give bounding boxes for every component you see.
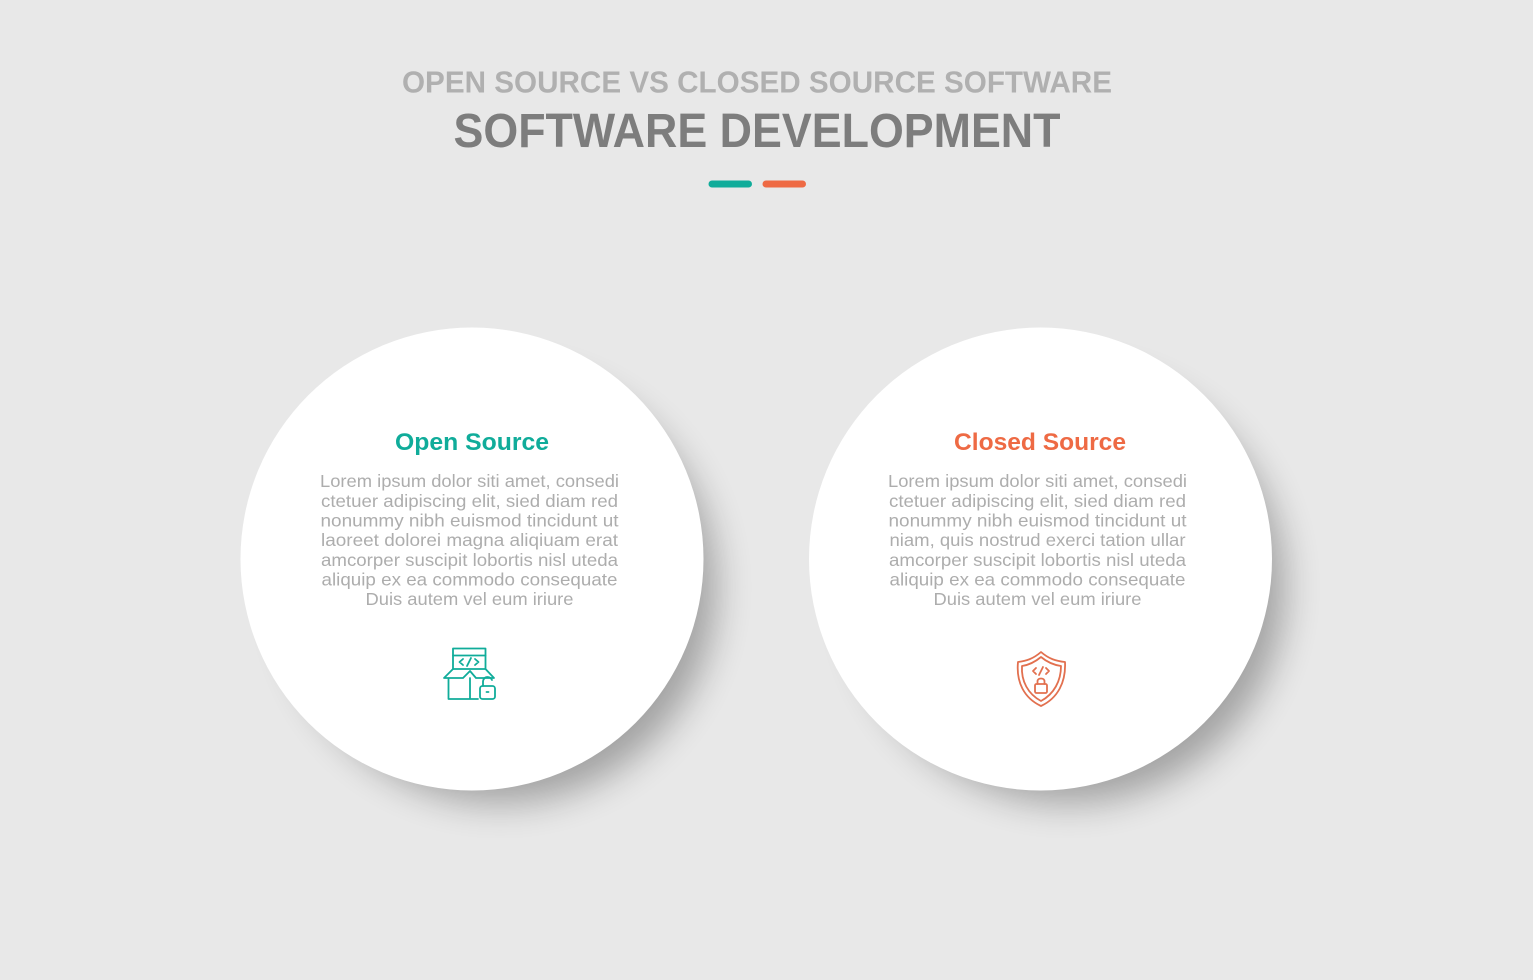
- open source description: Lorem ipsum dolor siti amet, consedi: [320, 471, 619, 491]
- closed source description: amcorper suscipit lobortis nisl uteda: [889, 550, 1186, 570]
- closed source description: ctetuer adipiscing elit, sied diam red: [889, 491, 1186, 511]
- icon: open box with code window and unlocked padlock: [444, 648, 495, 699]
- closed source description: [888, 471, 1187, 609]
- open source description: Duis autem vel eum iriure: [366, 589, 574, 609]
- main heading: SOFTWARE DEVELOPMENT: [454, 105, 1060, 158]
- panel: closed source: [809, 328, 1284, 803]
- closed source description: nonummy nibh euismod tincidunt ut: [888, 510, 1187, 530]
- open source description: [320, 471, 619, 609]
- open source description: aliquip ex ea commodo consequate: [322, 570, 618, 590]
- icon: shield with code and padlock: [1018, 652, 1065, 706]
- open source description: laoreet dolorei magna aliqiuam erat: [321, 530, 618, 550]
- open source description: nonummy nibh euismod tincidunt ut: [320, 510, 619, 530]
- closed source description: Lorem ipsum dolor siti amet, consedi: [888, 471, 1187, 491]
- open source description: ctetuer adipiscing elit, sied diam red: [321, 491, 618, 511]
- open source description: amcorper suscipit lobortis nisl uteda: [321, 550, 618, 570]
- panel: open source: [240, 328, 716, 803]
- circle shadow: [284, 371, 716, 803]
- title block: [402, 64, 1112, 158]
- white circle: [240, 328, 704, 790]
- closed source description: Duis autem vel eum iriure: [934, 589, 1142, 609]
- open source heading: Open Source: [395, 429, 549, 456]
- circle shadow: [852, 371, 1284, 803]
- subtitle: OPEN SOURCE VS CLOSED SOURCE SOFTWARE: [402, 64, 1112, 100]
- closed source description: aliquip ex ea commodo consequate: [890, 570, 1186, 590]
- closed source description: niam, quis nostrud exerci tation ullar: [890, 530, 1186, 550]
- closed source heading: Closed Source: [954, 429, 1126, 456]
- accent bars: [708, 180, 806, 188]
- white circle: [809, 328, 1272, 790]
